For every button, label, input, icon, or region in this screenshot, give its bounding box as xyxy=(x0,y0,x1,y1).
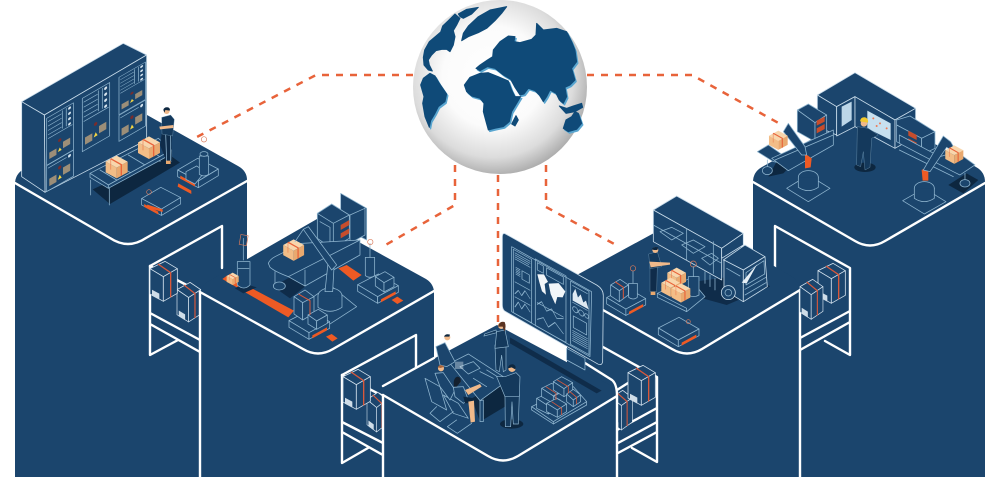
worker with hard hat xyxy=(854,117,878,172)
left robot arm xyxy=(783,123,830,202)
orange guide strips xyxy=(222,265,403,342)
dashed connector lines xyxy=(195,75,782,322)
platform 1 body xyxy=(15,106,247,477)
australia xyxy=(563,112,582,132)
eurasia xyxy=(476,23,577,103)
conveyor xyxy=(90,138,180,205)
arctic islands xyxy=(458,7,478,18)
truck xyxy=(653,196,770,305)
platform 2 frame xyxy=(342,335,416,375)
cardboard box left xyxy=(106,156,128,178)
AGV flat xyxy=(142,187,181,215)
storage box upper on shelf 2 xyxy=(343,369,370,409)
scene: truck loading xyxy=(607,196,770,347)
seated woman 2 xyxy=(453,377,482,423)
monitor stand xyxy=(567,348,585,370)
operator table xyxy=(450,354,508,422)
platform 1 shelf xyxy=(150,266,200,355)
left parcel xyxy=(769,131,788,150)
africa xyxy=(464,73,521,130)
storage boxes on shelf 5 xyxy=(818,263,845,303)
platform 1 front edge xyxy=(15,181,247,244)
worker xyxy=(159,107,174,164)
standing man xyxy=(497,364,523,429)
storage box lower on shelf 1 xyxy=(177,282,201,322)
AGV with tower xyxy=(358,239,398,303)
monitor shadow xyxy=(510,337,602,393)
platform 5 frame xyxy=(775,226,850,355)
platform 5 body xyxy=(753,107,985,477)
platform 4 body xyxy=(567,215,823,477)
server cabinet xyxy=(22,43,147,192)
storage box upper on shelf 4 xyxy=(628,365,655,405)
dashboard content xyxy=(513,247,589,355)
platform 4 front edge xyxy=(603,290,800,354)
madagascar xyxy=(512,116,518,126)
continent shapes xyxy=(421,7,583,132)
cardboard box xyxy=(283,239,304,261)
tower cart at left xyxy=(235,234,257,293)
pallet of crates xyxy=(532,377,587,424)
robot arm xyxy=(295,227,357,324)
pallet cart with parcels xyxy=(657,261,705,312)
southeast asia islands xyxy=(559,103,583,113)
machine cabinet xyxy=(317,204,365,248)
wall monitor xyxy=(502,233,603,365)
AGV flat xyxy=(658,317,699,347)
left machine xyxy=(797,104,827,142)
platform 5 front edge xyxy=(753,182,985,246)
control booth xyxy=(817,73,916,148)
right parcel xyxy=(945,145,963,164)
scene: robot workstation xyxy=(757,73,978,214)
platform 1 frame xyxy=(150,226,222,268)
right machine xyxy=(897,116,935,155)
greenland xyxy=(462,7,507,41)
seated woman 1 xyxy=(435,365,455,400)
globe xyxy=(413,0,587,174)
back panel xyxy=(341,193,367,240)
platform 2 shelf xyxy=(342,375,383,463)
loader worker xyxy=(649,247,670,295)
continent highlights xyxy=(422,25,583,133)
storage box upper on shelf 1 xyxy=(150,261,177,301)
platform 4 shelf frame xyxy=(603,347,657,462)
chairs xyxy=(425,378,472,433)
scene: control room xyxy=(425,233,603,433)
right robot arm xyxy=(903,136,958,214)
south america xyxy=(421,73,447,127)
conveyor xyxy=(268,240,360,298)
platform 3 outline xyxy=(383,358,617,477)
scene: control cabinet and conveyor xyxy=(22,43,218,215)
left conveyor table xyxy=(757,130,833,177)
scene: robot arm and AGVs xyxy=(222,193,403,342)
platform 2 body xyxy=(200,219,434,477)
AGV with robot arm xyxy=(178,137,218,194)
right conveyor table xyxy=(899,135,978,193)
small box xyxy=(227,273,239,285)
storage box lower on shelf 2 xyxy=(367,392,387,432)
storage box lower on shelf 4 xyxy=(611,390,632,430)
seated man xyxy=(436,334,455,367)
north america xyxy=(423,14,460,71)
continents xyxy=(421,7,583,133)
platform 3 body xyxy=(383,325,617,477)
storage box on shelf 5 xyxy=(800,279,823,319)
AGV with crate xyxy=(607,266,646,315)
platform 2 front edge xyxy=(200,291,434,354)
cardboard box right xyxy=(138,136,160,159)
standing presenter xyxy=(484,322,508,372)
AGV with crates front xyxy=(289,290,330,339)
